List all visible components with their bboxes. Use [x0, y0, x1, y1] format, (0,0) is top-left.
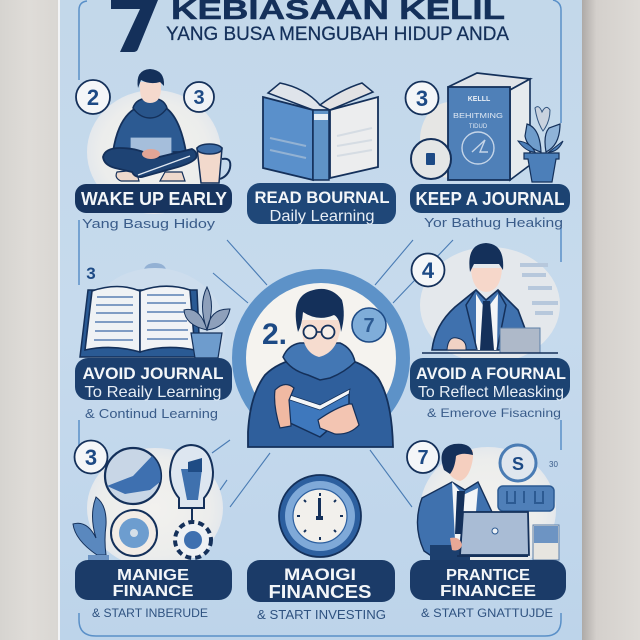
- label: avoid a fournal: To Reflect Mleasking: [418, 384, 564, 401]
- icon: coin badge: [500, 445, 536, 481]
- label: manige finance: MANIGE: [117, 567, 189, 584]
- label: manige finance: FINANCE: [112, 583, 194, 600]
- icon: light bulb: [170, 445, 213, 520]
- backdrop circle: [420, 102, 480, 178]
- label: read journal: [247, 183, 396, 225]
- label: read journal: READ BOURNAL: [254, 188, 390, 207]
- label: read journal: Daily Learning: [270, 208, 374, 225]
- label: wake up early: [75, 184, 232, 213]
- label: manige finance: [75, 560, 232, 600]
- icon: thick book: BEHITMING: [453, 113, 503, 120]
- label: avoid journal: [75, 358, 232, 401]
- panel: read journal: [247, 83, 396, 225]
- panel: avoid journal: [75, 263, 232, 421]
- label: prantice financee: PRANTICE: [446, 567, 530, 584]
- panel: keep a journal: [406, 73, 570, 230]
- title subheading: YANG BUSA MENGUBAH HIDUP ANDA: [166, 24, 509, 45]
- icon: blue tiles: [498, 486, 554, 511]
- panel: wake up early: [75, 69, 232, 231]
- panel: avoid a fournal: [410, 243, 570, 420]
- icon: open book: [263, 83, 378, 180]
- icon: coffee mug: [197, 144, 230, 183]
- icon: number 3 badge: [406, 82, 438, 114]
- caption: & START INVESTING: [257, 607, 386, 622]
- icon: number 3 badge: [184, 82, 214, 112]
- connector lines: [212, 240, 453, 507]
- icon: open book with lines: [80, 286, 200, 357]
- caption: & Emerove Fisacning: [427, 406, 561, 420]
- label: keep a journal: KEEP A JOURNAL: [416, 189, 565, 209]
- title numeral 7: [111, 0, 158, 52]
- label: prantice financee: FINANCEE: [440, 583, 536, 600]
- backdrop: [85, 268, 225, 392]
- icon: clock: [279, 475, 361, 557]
- icon: glass: [533, 525, 559, 560]
- icon: clock: [105, 448, 161, 504]
- icon: number 3 badge: 3: [416, 86, 428, 111]
- icon: potted plant: [518, 107, 563, 182]
- icon: number 7 badge: 7: [363, 315, 375, 337]
- icon: faded chart: [520, 265, 558, 313]
- title: [111, 0, 509, 52]
- icon: number 4 badge: 4: [422, 258, 435, 283]
- icon: number 7 badge: [352, 308, 386, 342]
- faded mark: [144, 263, 166, 277]
- panel: magic finances: [247, 475, 395, 622]
- label: magic finances: [247, 560, 395, 602]
- backdrop circle: [87, 90, 221, 214]
- icon: number 7 badge: 7: [417, 447, 429, 469]
- label: magic finances: FINANCES: [268, 582, 372, 602]
- backdrop circle: [87, 448, 223, 568]
- icon: number 3 badge: 3: [193, 87, 205, 109]
- icon: number 4 badge: [412, 254, 444, 286]
- icon: potted plant: [184, 287, 230, 358]
- icon: number 7 badge: [407, 441, 439, 473]
- icon: thick book: TIDUD: [469, 124, 488, 130]
- panel: central figure: [239, 276, 403, 447]
- caption: & START GNATTUJDE: [421, 606, 553, 620]
- caption: Yor Bathug Heaking: [424, 216, 563, 230]
- figure: reader with glasses: [248, 289, 393, 447]
- icon: thick book: KELLL: [468, 96, 491, 103]
- caption: & Continud Learning: [85, 407, 218, 421]
- icon: number 2 badge: 2: [87, 85, 99, 110]
- icon: number 3 badge: 3: [85, 445, 97, 470]
- icon: dial: [111, 510, 157, 556]
- figure: man at laptop: [417, 444, 529, 560]
- icon: thick book: [448, 73, 530, 180]
- figure: man in suit: [422, 243, 558, 353]
- label: magic finances: MAOIGI: [284, 565, 356, 584]
- backdrop circle: [420, 247, 560, 363]
- panel: manige finance: [73, 440, 232, 620]
- label: prantice financee: [410, 560, 566, 600]
- icon: gear: [175, 522, 211, 558]
- icon: number 2 badge: [76, 80, 110, 114]
- caption: Yang Basug Hidoy: [82, 217, 216, 231]
- icon: potted plant: [73, 497, 109, 560]
- figure: person sitting with laptop: [103, 69, 196, 181]
- label: avoid a fournal: AVOID A FOURNAL: [416, 364, 566, 383]
- frame: [79, 0, 561, 636]
- number 3: 3: [86, 264, 96, 283]
- caption: & START INBERUDE: [92, 606, 208, 620]
- number 2: 2.: [262, 318, 287, 351]
- icon: number 3 badge: [74, 440, 108, 474]
- icon: small dial: [411, 139, 451, 179]
- label: avoid a fournal: [410, 358, 570, 401]
- panel: prantice financee: [407, 441, 566, 620]
- label: avoid journal: To Reaily Learning: [84, 384, 222, 401]
- label: keep a journal: [410, 184, 570, 213]
- ring: [239, 276, 403, 440]
- label: avoid journal: AVOID JOURNAL: [82, 364, 224, 383]
- label: wake up early: WAKE UP EARLY: [81, 189, 227, 209]
- icon: coin badge: S: [512, 454, 524, 474]
- small note: 30: [549, 460, 558, 469]
- backdrop circle: [420, 447, 556, 573]
